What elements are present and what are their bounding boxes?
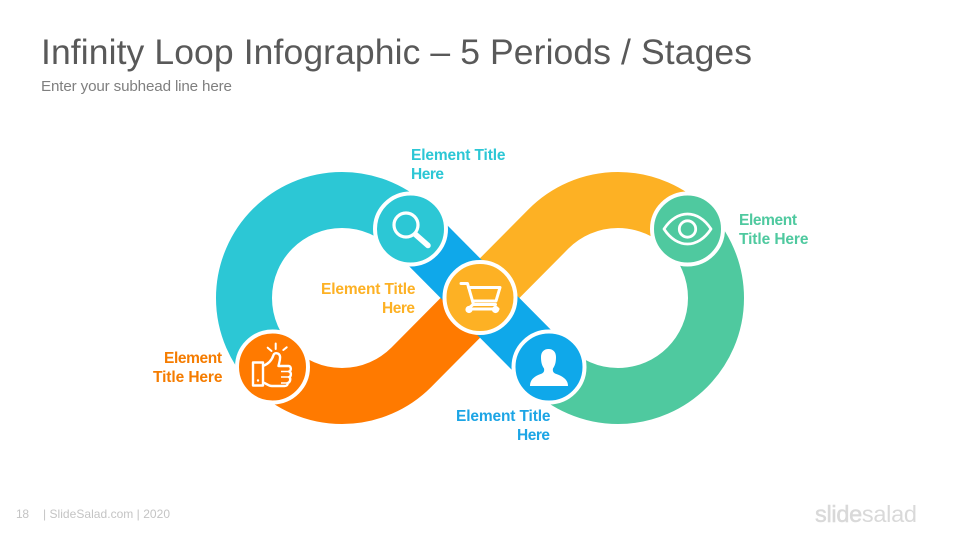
band: green segment xyxy=(549,229,716,396)
label: blue element title: Element Title xyxy=(456,408,551,425)
icon: thumbs up badge xyxy=(237,332,308,402)
label: green element title xyxy=(739,212,809,248)
label: yellow element title: Element Title xyxy=(321,281,416,298)
label: blue element title: Here xyxy=(517,427,550,444)
title: Infinity Loop Infographic – 5 Periods / Stages xyxy=(41,32,752,72)
page number: 18 xyxy=(16,507,29,521)
icon: person badge xyxy=(514,332,584,402)
infinity loop chart xyxy=(237,194,723,402)
icon: shopping cart badge xyxy=(444,262,516,333)
band: teal segment xyxy=(244,200,411,367)
band: orange segment xyxy=(273,298,480,396)
band: blue diagonal segment xyxy=(411,229,549,367)
label: yellow element title xyxy=(321,281,416,317)
label: orange element title: Title Here xyxy=(153,369,223,386)
icon: eye badge xyxy=(652,194,723,264)
label: green element title: Title Here xyxy=(739,231,809,248)
label: orange element title: Element xyxy=(164,350,222,367)
label: teal element title: Element Title xyxy=(411,147,506,164)
label: teal element title: Here xyxy=(411,166,444,183)
subhead: Enter your subhead line here xyxy=(41,78,232,95)
logo: slidesalad wordmark: slidesalad xyxy=(815,501,917,527)
label: yellow element title: Here xyxy=(382,300,415,317)
band: yellow segment xyxy=(480,200,687,298)
icon: magnifier badge xyxy=(375,194,446,264)
label: orange element title xyxy=(153,350,223,386)
footer text: | SlideSalad.com | 2020 xyxy=(43,507,170,521)
label: teal element title xyxy=(411,147,506,183)
label: blue element title xyxy=(456,408,551,444)
label: green element title: Element xyxy=(739,212,797,229)
